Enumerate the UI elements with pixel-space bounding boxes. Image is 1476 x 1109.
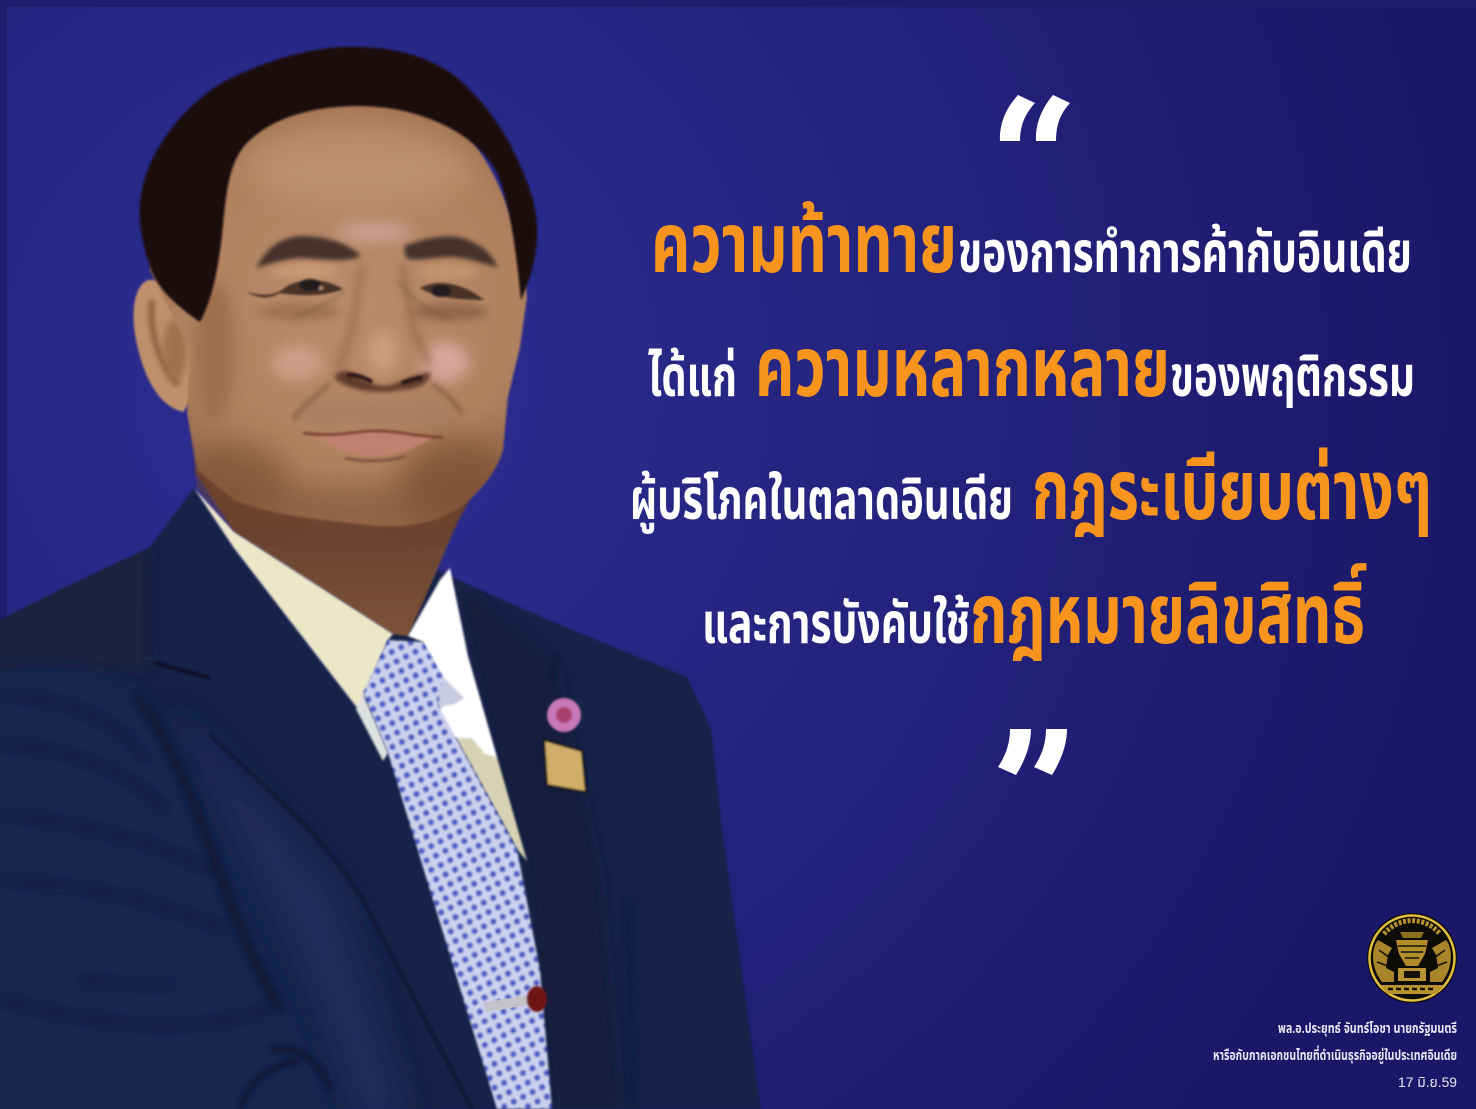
lapel pin (547, 698, 581, 732)
credit caption: 17 มิ.ย.59 (1398, 1074, 1457, 1090)
seal ornament (1373, 921, 1451, 994)
quote line 2: ความหลากหลาย (755, 320, 1170, 414)
ear (133, 280, 205, 412)
face (150, 80, 527, 526)
government seal emblem (1367, 913, 1457, 1003)
nose (334, 330, 430, 392)
shirt and collar (194, 488, 527, 861)
right eyebrow (404, 236, 498, 268)
suit jacket (0, 488, 761, 1109)
quote line 1: ความท้าทาย (651, 196, 957, 290)
quote line 1 (651, 196, 1412, 290)
gold badge (544, 740, 586, 792)
quote line 2: ได้แก่ (648, 345, 737, 409)
credit caption (1213, 1020, 1457, 1090)
right eye (420, 283, 484, 300)
quote line 3: ผู้บริโภคในตลาดอินเดีย (630, 468, 1013, 534)
quote line 4 (702, 563, 1367, 661)
mouth (303, 431, 443, 461)
left eye (247, 279, 343, 297)
tie bar (483, 986, 547, 1012)
quote line 4: และการบังคับใช้ (702, 592, 970, 656)
portrait: man in navy suit (0, 47, 761, 1109)
hair (140, 47, 537, 322)
closing quotation mark (998, 729, 1067, 775)
necktie (363, 640, 552, 1109)
left eyebrow (256, 236, 361, 268)
quote line 3 (630, 443, 1432, 537)
neck (194, 470, 490, 636)
opening quotation mark (1000, 95, 1070, 141)
